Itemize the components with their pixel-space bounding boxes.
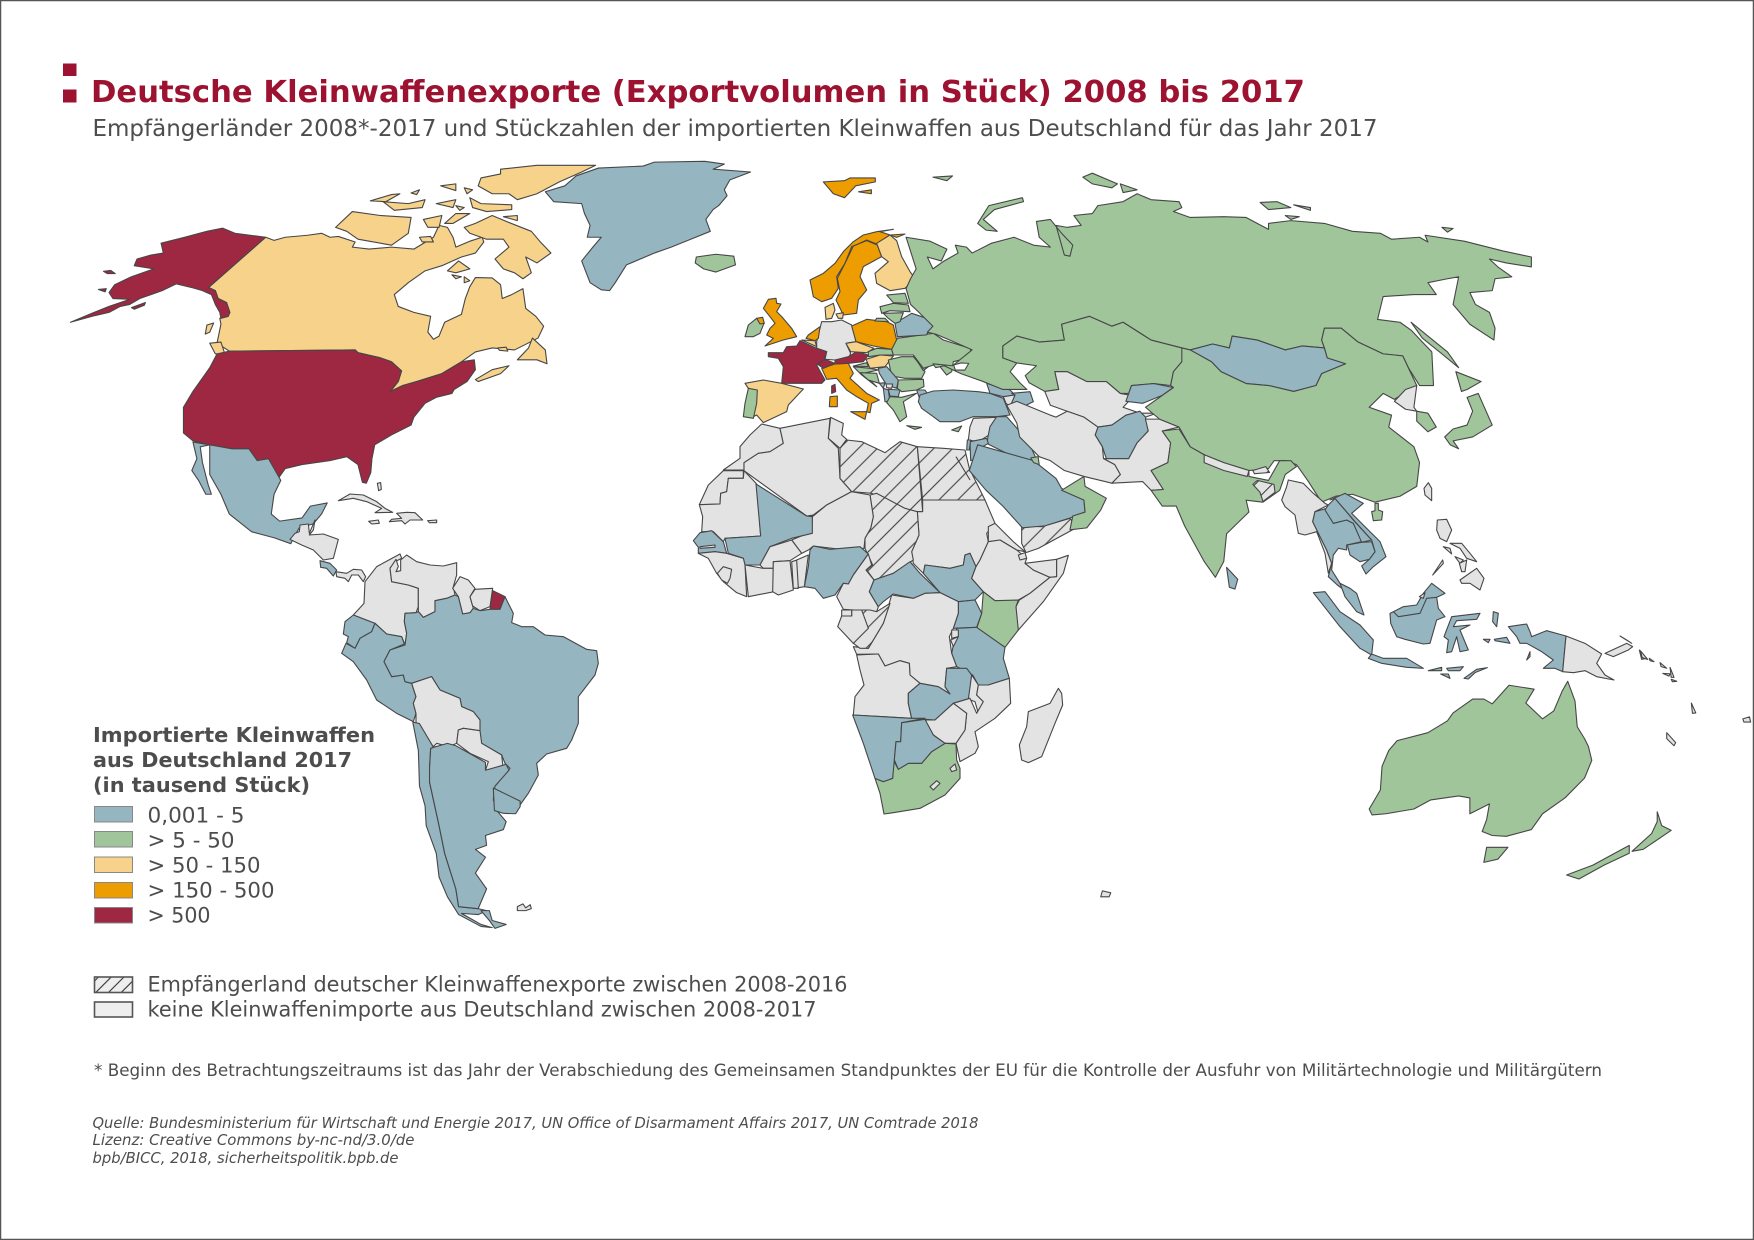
South Korea xyxy=(1417,411,1436,432)
Saudi Arabia xyxy=(969,445,1085,528)
Panama xyxy=(336,569,366,582)
legend xyxy=(93,723,848,1022)
legend class 50 - 150 xyxy=(94,854,260,878)
Argentina xyxy=(430,743,509,909)
Moldova xyxy=(913,355,928,371)
Iceland xyxy=(695,254,735,272)
legend heading: aus Deutschland 2017 xyxy=(93,748,352,772)
Czechia xyxy=(846,342,874,353)
legend class 5 - 50: > 5 - 50 xyxy=(148,828,234,852)
USA xyxy=(183,350,475,483)
Afghanistan xyxy=(1095,411,1148,459)
Zimbabwe xyxy=(925,703,967,743)
Uganda xyxy=(953,600,982,628)
Germany xyxy=(817,320,856,360)
Mali xyxy=(725,484,812,565)
Yemen xyxy=(1022,518,1075,553)
title marker icon xyxy=(63,64,76,102)
title: Deutsche Kleinwaffenexporte (Exportvolumen in Stück) 2008 bis 2017 xyxy=(91,75,1305,110)
Svalbard xyxy=(823,178,875,198)
Alaska xyxy=(70,228,266,322)
Equatorial Guinea xyxy=(842,610,852,616)
Cameroon xyxy=(837,554,878,612)
Greenland xyxy=(545,161,751,291)
Caucasus xyxy=(987,383,1033,408)
legend class 150 - 500 xyxy=(94,878,274,902)
Baltic states xyxy=(875,293,910,323)
Tasmania xyxy=(1484,847,1508,862)
Denmark xyxy=(825,303,843,319)
Caribbean islands xyxy=(338,483,437,524)
Iran xyxy=(1007,401,1120,483)
France xyxy=(768,341,827,383)
Romania xyxy=(888,357,925,378)
legend no imports: keine Kleinwaffenimporte aus Deutschland zwischen 2008-2017 xyxy=(148,998,816,1022)
Botswana xyxy=(894,719,945,769)
Falkland Islands xyxy=(517,904,531,911)
Central America xyxy=(290,520,338,560)
Iraq xyxy=(987,417,1036,461)
Cambodia xyxy=(1347,542,1375,562)
Thailand xyxy=(1313,508,1362,591)
Kenya xyxy=(977,592,1018,647)
North America xyxy=(70,161,875,544)
Central and South America (north) xyxy=(290,483,598,805)
Mediterranean islands xyxy=(829,384,962,432)
Kyrgyzstan xyxy=(1126,384,1173,403)
Canadian Arctic islands xyxy=(205,165,596,382)
Turkey xyxy=(918,390,1010,422)
Malawi xyxy=(968,675,983,713)
Switzerland xyxy=(817,359,835,368)
Sakhalin xyxy=(1411,322,1459,368)
Philippines xyxy=(1433,519,1484,590)
legend class 150 - 500: > 150 - 500 xyxy=(148,878,274,902)
world map xyxy=(70,161,1751,928)
South Sudan xyxy=(923,553,983,602)
Senegal xyxy=(693,531,727,553)
Paraguay xyxy=(457,728,503,773)
Sri Lanka xyxy=(1227,567,1238,589)
Bhutan xyxy=(1253,467,1270,474)
sources: bpb/BICC, 2018, sicherheitspolitik.bpb.de xyxy=(92,1149,398,1167)
Spain xyxy=(745,380,803,423)
Israel and Lebanon xyxy=(967,440,971,450)
Japan xyxy=(1445,372,1492,449)
Libya xyxy=(840,440,923,512)
Netherlands xyxy=(806,327,820,341)
Eritrea xyxy=(988,523,1025,552)
Mexico xyxy=(192,442,327,544)
India xyxy=(1151,429,1296,577)
Papua New Guinea xyxy=(1563,636,1614,680)
Myanmar xyxy=(1282,480,1332,573)
Gulf of Suez line xyxy=(956,457,970,480)
legend class 50 - 150: > 50 - 150 xyxy=(148,854,260,878)
Oceania xyxy=(1101,651,1751,897)
Djibouti xyxy=(1018,553,1027,560)
Morocco xyxy=(723,424,783,470)
Russia xyxy=(906,194,1531,389)
Sudan xyxy=(912,500,995,573)
Burkina Faso xyxy=(760,540,802,568)
Australia xyxy=(1369,681,1592,836)
Ukraine xyxy=(892,333,973,375)
Brunei xyxy=(1419,593,1425,598)
Rwanda and Burundi xyxy=(951,630,958,647)
Niger xyxy=(792,492,873,553)
Ethiopia xyxy=(972,540,1050,602)
Sweden xyxy=(836,241,882,315)
Mauritania xyxy=(699,471,761,542)
Norway xyxy=(810,229,905,302)
North Korea xyxy=(1394,386,1417,411)
Namibia xyxy=(853,715,925,782)
Malay Peninsula xyxy=(1340,583,1364,615)
sources: Lizenz: Creative Commons by-nc-nd/3.0/de xyxy=(92,1131,414,1149)
Mozambique xyxy=(953,678,1011,762)
Somalia xyxy=(1016,555,1068,630)
Egypt xyxy=(917,447,985,500)
Algeria xyxy=(744,418,852,516)
legend class 0,001 - 5: 0,001 - 5 xyxy=(148,804,244,828)
Asia xyxy=(906,173,1531,589)
Southeast Asia xyxy=(1282,480,1654,680)
Pacific islands xyxy=(1640,651,1751,746)
Bolivia xyxy=(412,677,480,747)
Slovakia xyxy=(868,348,893,357)
Colombia xyxy=(353,554,418,645)
Italy xyxy=(822,363,879,413)
Pakistan xyxy=(1104,419,1179,490)
Lesotho and Eswatini xyxy=(930,764,957,790)
Jordan xyxy=(970,438,988,461)
Belgium xyxy=(802,340,817,347)
Sumatra xyxy=(1313,592,1373,655)
Ireland xyxy=(745,318,764,337)
Maluku and Lesser Sunda islands xyxy=(1428,612,1530,679)
South Africa xyxy=(875,743,960,814)
legend class 0,001 - 5 xyxy=(94,804,244,828)
Syria xyxy=(968,417,997,442)
French Guiana xyxy=(490,591,505,609)
Kuwait xyxy=(1031,457,1039,465)
Sulawesi xyxy=(1444,613,1480,653)
China xyxy=(1145,328,1420,502)
DR Congo xyxy=(853,593,958,694)
United Kingdom xyxy=(763,298,797,346)
Poland xyxy=(852,319,897,349)
Europe and Middle East xyxy=(743,229,1036,461)
Canada xyxy=(209,225,544,391)
legend hatched recipients: Empfängerland deutscher Kleinwaffenexporte zwischen 2008-2016 xyxy=(148,972,848,996)
Mongolia xyxy=(1190,336,1346,391)
Tanzania xyxy=(952,627,1009,685)
Turkmenistan, Uzbekistan, Tajikistan xyxy=(1045,372,1157,427)
Tunisia xyxy=(828,417,847,448)
Bangladesh xyxy=(1253,480,1275,501)
Reunion xyxy=(1101,891,1111,897)
Hainan xyxy=(1372,503,1383,521)
Gabon xyxy=(838,610,868,643)
subtitle: Empfängerländer 2008*-2017 und Stückzahlen der importierten Kleinwaffen aus Deutschland für das Jahr 2017 xyxy=(92,116,1378,142)
legend heading: (in tausend Stück) xyxy=(93,773,310,797)
Suriname xyxy=(470,588,493,611)
Sea of Azov xyxy=(954,363,969,370)
South America (south) xyxy=(413,722,531,928)
Vietnam xyxy=(1330,493,1386,574)
legend class over 500: > 500 xyxy=(148,904,210,928)
Northern Ireland xyxy=(757,317,764,324)
Nigeria xyxy=(804,546,868,598)
sources xyxy=(92,1114,979,1167)
Uruguay xyxy=(493,788,520,814)
Borneo internal border xyxy=(1393,597,1437,617)
Gambia xyxy=(700,545,715,548)
Alaskan islands xyxy=(98,270,145,309)
New Britain and nearby islands xyxy=(1605,636,1654,662)
Guyana xyxy=(453,577,475,614)
footnote: * Beginn des Betrachtungszeitraums ist das Jahr der Verabschiedung des Gemeinsamen Standpunktes der EU für die Kontrolle der Ausfuhr von Militärtechnologie und Militärgütern xyxy=(94,1061,1602,1081)
Congo xyxy=(853,603,890,648)
Peru xyxy=(342,623,416,722)
Hungary xyxy=(866,355,893,368)
West Africa coast xyxy=(698,552,808,597)
Africa xyxy=(693,417,1075,814)
Nepal xyxy=(1204,455,1249,476)
legend class over 500 xyxy=(94,904,210,928)
Zambia xyxy=(908,668,972,720)
legend heading xyxy=(93,723,375,797)
sources: Quelle: Bundesministerium für Wirtschaft und Energie 2017, UN Office of Disarmament Affairs 2017, UN Comtrade 2018 xyxy=(92,1114,979,1132)
Laos xyxy=(1325,498,1372,542)
Tierra del Fuego xyxy=(481,911,506,928)
Central African Republic xyxy=(869,562,940,607)
Chile xyxy=(413,722,492,928)
Western Sahara xyxy=(699,471,743,505)
Taiwan xyxy=(1424,483,1432,501)
Balkans xyxy=(853,363,928,422)
Finland xyxy=(875,235,915,291)
Kazakhstan xyxy=(1003,316,1187,393)
Angola xyxy=(853,654,920,718)
Belarus xyxy=(895,313,933,337)
Oman and UAE xyxy=(1062,476,1106,530)
Java xyxy=(1368,654,1423,668)
Portugal xyxy=(743,388,757,418)
Brazil xyxy=(384,595,598,805)
Borneo xyxy=(1390,583,1445,644)
Austria xyxy=(835,352,868,364)
Madagascar xyxy=(1019,688,1063,763)
Chad xyxy=(865,493,919,580)
legend class 5 - 50 xyxy=(94,828,234,852)
legend heading: Importierte Kleinwaffen xyxy=(93,723,375,747)
Novaya Zemlya and Arctic islands xyxy=(933,173,1453,232)
New Zealand xyxy=(1567,812,1671,879)
Venezuela xyxy=(390,555,457,617)
Ecuador xyxy=(343,615,375,648)
Western New Guinea xyxy=(1508,624,1566,672)
Costa Rica xyxy=(320,561,337,576)
Somaliland xyxy=(1025,559,1057,577)
